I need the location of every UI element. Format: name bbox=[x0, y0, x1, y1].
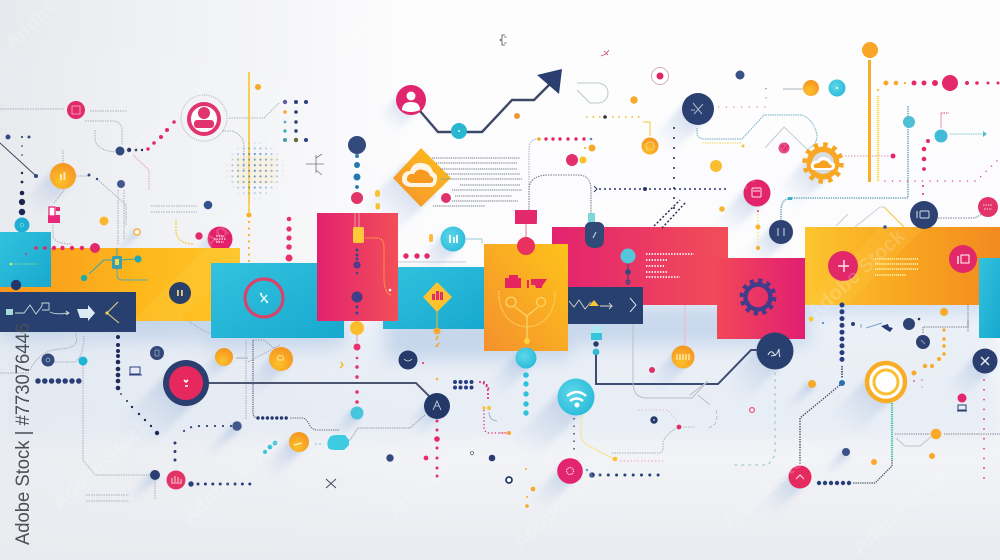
dots bbox=[710, 142, 790, 212]
connector icon on yellow band bbox=[81, 248, 148, 281]
long diagonal shadows bbox=[28, 100, 985, 512]
pink vertical dots below A bbox=[434, 420, 440, 478]
panel: cyan center bbox=[383, 267, 484, 329]
orange curve dots right bbox=[912, 308, 948, 376]
diamond cloud icon bbox=[393, 148, 451, 207]
pink plus circle bbox=[828, 251, 858, 281]
orange sphere node bbox=[6, 134, 125, 189]
pink device circle bbox=[744, 180, 770, 206]
orange column bbox=[862, 42, 879, 182]
panel: pink with gear bbox=[717, 258, 805, 339]
cyan column bottom bbox=[500, 326, 602, 435]
watermark diagonal: Adobe Stock bbox=[849, 460, 955, 559]
pink chart node and dot row bbox=[166, 470, 254, 490]
panel: pink wide with text dots bbox=[552, 227, 728, 305]
diamond bar chart on cyan bbox=[423, 282, 452, 347]
teal dotted vertical connector bbox=[781, 106, 915, 222]
navy circle on connector bbox=[769, 220, 793, 244]
teal dotted to lower pink node bbox=[819, 403, 892, 483]
teal dashed path bbox=[730, 372, 775, 465]
panel: yellow band bbox=[0, 248, 240, 321]
cyan dropper bbox=[620, 248, 636, 285]
yellow hook ball bbox=[642, 122, 658, 154]
navy smile node bbox=[340, 350, 438, 380]
orange gear with cloud bbox=[804, 144, 842, 182]
icon: laptop bbox=[129, 367, 142, 375]
dotted text block bbox=[432, 158, 522, 206]
panel: orange right bbox=[805, 227, 1000, 305]
pink dotted row bbox=[885, 158, 1000, 181]
halftone sphere bbox=[225, 140, 285, 200]
panel: navy center with flow bbox=[568, 287, 643, 324]
ring target bbox=[652, 68, 668, 84]
small dots mid left bbox=[100, 201, 212, 240]
dark polyline to chart circle bbox=[596, 350, 760, 384]
icon: pink node top left bbox=[67, 101, 85, 119]
orange bars ball bbox=[672, 346, 694, 368]
navy node bbox=[150, 346, 164, 360]
avatar ring icon bbox=[181, 95, 227, 141]
gray arc and navy dotted line bbox=[529, 175, 728, 213]
orange ball cyan blob bbox=[263, 415, 425, 454]
pink dashed to gear bbox=[845, 154, 896, 158]
icon: pink document bbox=[48, 207, 60, 223]
navy id circle and link bbox=[910, 197, 998, 229]
large pink navy node bbox=[163, 360, 209, 406]
dotted row and balls upper center bbox=[537, 137, 596, 166]
navy and pink curve block bbox=[455, 382, 510, 433]
navy tools circle bbox=[682, 93, 714, 125]
large dark line from pink node bbox=[209, 383, 430, 397]
gray pill outline bbox=[577, 83, 608, 103]
panel: cyan right edge bbox=[979, 258, 1000, 338]
panel: pink tall bbox=[317, 213, 398, 321]
chart navy circle bbox=[756, 332, 794, 370]
small pink glyph bbox=[601, 50, 609, 56]
dots below pink device bbox=[756, 210, 760, 250]
pink circle node bbox=[208, 226, 232, 252]
dot grid upper bbox=[283, 100, 308, 142]
panel: cyan with ring bbox=[211, 263, 344, 338]
avatar pink icon bbox=[396, 85, 426, 115]
dark diagonal dashes bbox=[654, 200, 686, 228]
pink dots right column bbox=[983, 380, 985, 483]
small glyphs top bbox=[500, 35, 507, 45]
vertical dots and cyan node bbox=[14, 145, 30, 232]
top right balls bbox=[736, 70, 846, 96]
watermark diagonal: Adobe Stock bbox=[434, 35, 540, 134]
watermark diagonal: Adobe Stock bbox=[804, 225, 910, 324]
pink info circle bbox=[949, 245, 977, 273]
lower small dots bbox=[386, 452, 535, 508]
small dotted row top center bbox=[514, 96, 640, 119]
wifi circle bbox=[558, 378, 594, 416]
orange balls lower bbox=[215, 347, 293, 371]
pink vertical dots middle bbox=[350, 321, 364, 420]
right navy node A bbox=[424, 393, 450, 419]
x mark bbox=[326, 479, 336, 488]
gray right connector with orange ball bbox=[895, 429, 1000, 446]
left gray connector lines bbox=[0, 103, 280, 501]
gray pill path center lower bbox=[633, 305, 717, 428]
gray-navy dotted connector bbox=[253, 340, 340, 430]
pink node and navy row lower center bbox=[557, 458, 660, 484]
panel: navy left with flow bbox=[0, 292, 136, 332]
small glyph left bbox=[306, 154, 324, 175]
vertical watermark label: Adobe Stock | #773076446 bbox=[13, 323, 34, 545]
watermark diagonal: Adobe Stock bbox=[49, 415, 155, 514]
panel shadows bbox=[0, 290, 1000, 360]
navy dot on panel edge bbox=[11, 280, 21, 290]
panel: cyan left bbox=[0, 232, 51, 287]
upward arrow line bbox=[420, 69, 562, 139]
navy dashed curve to pink chart bbox=[150, 421, 242, 480]
watermark diagonal: Adobe Stock bbox=[179, 430, 285, 529]
watermark diagonal: Adobe Stock bbox=[734, 95, 840, 194]
navy tools right bbox=[972, 348, 998, 374]
navy node with vertical dots bbox=[348, 136, 380, 210]
watermark diagonal: Adobe Stock bbox=[384, 425, 490, 524]
pink vertical dots bbox=[286, 217, 292, 262]
concentric ring bbox=[867, 363, 905, 401]
panel: orange center bbox=[484, 244, 568, 351]
wifi connectors bbox=[574, 410, 695, 461]
top right dot row bbox=[884, 75, 1000, 91]
small pink dots and rings center bbox=[649, 367, 816, 412]
dotted link to avatar bbox=[116, 120, 176, 156]
cyan sphere with bars bbox=[398, 226, 482, 262]
pink dot row bbox=[34, 243, 100, 253]
top right teal connector bbox=[697, 88, 817, 152]
watermark diagonal: Adobe Stock bbox=[509, 455, 615, 554]
lower right dots bbox=[842, 448, 935, 465]
gray angles above orange panel bbox=[836, 207, 904, 227]
pink pin and laptop bbox=[957, 394, 967, 411]
pink lower dots by ring bbox=[913, 379, 923, 388]
navy circle with pause glyph bbox=[169, 282, 191, 304]
watermark diagonal: Adobe Stock bbox=[719, 435, 825, 534]
gray connector right bbox=[923, 305, 968, 333]
pink node lower right bbox=[788, 466, 812, 488]
lower left dotted rows bbox=[38, 354, 88, 381]
watermark diagonal: Adobe Stock bbox=[119, 65, 225, 164]
navy vertical dots bbox=[673, 128, 675, 214]
yellow vertical with dots bbox=[176, 72, 261, 262]
cyan arrow node bbox=[934, 113, 987, 142]
dark line upper left bbox=[0, 143, 35, 175]
navy column to right bbox=[800, 305, 845, 465]
navy dotted vertical and diagonal bbox=[116, 335, 159, 435]
navy bottle icon bbox=[585, 213, 604, 248]
watermark diagonal: Adobe Stock bbox=[519, 145, 625, 244]
pink connector tag bbox=[515, 139, 538, 255]
watermark diagonal: Adobe Stock bbox=[199, 155, 305, 254]
mini navy and dots under orange panel bbox=[809, 317, 930, 349]
pink right dots bbox=[922, 139, 930, 195]
